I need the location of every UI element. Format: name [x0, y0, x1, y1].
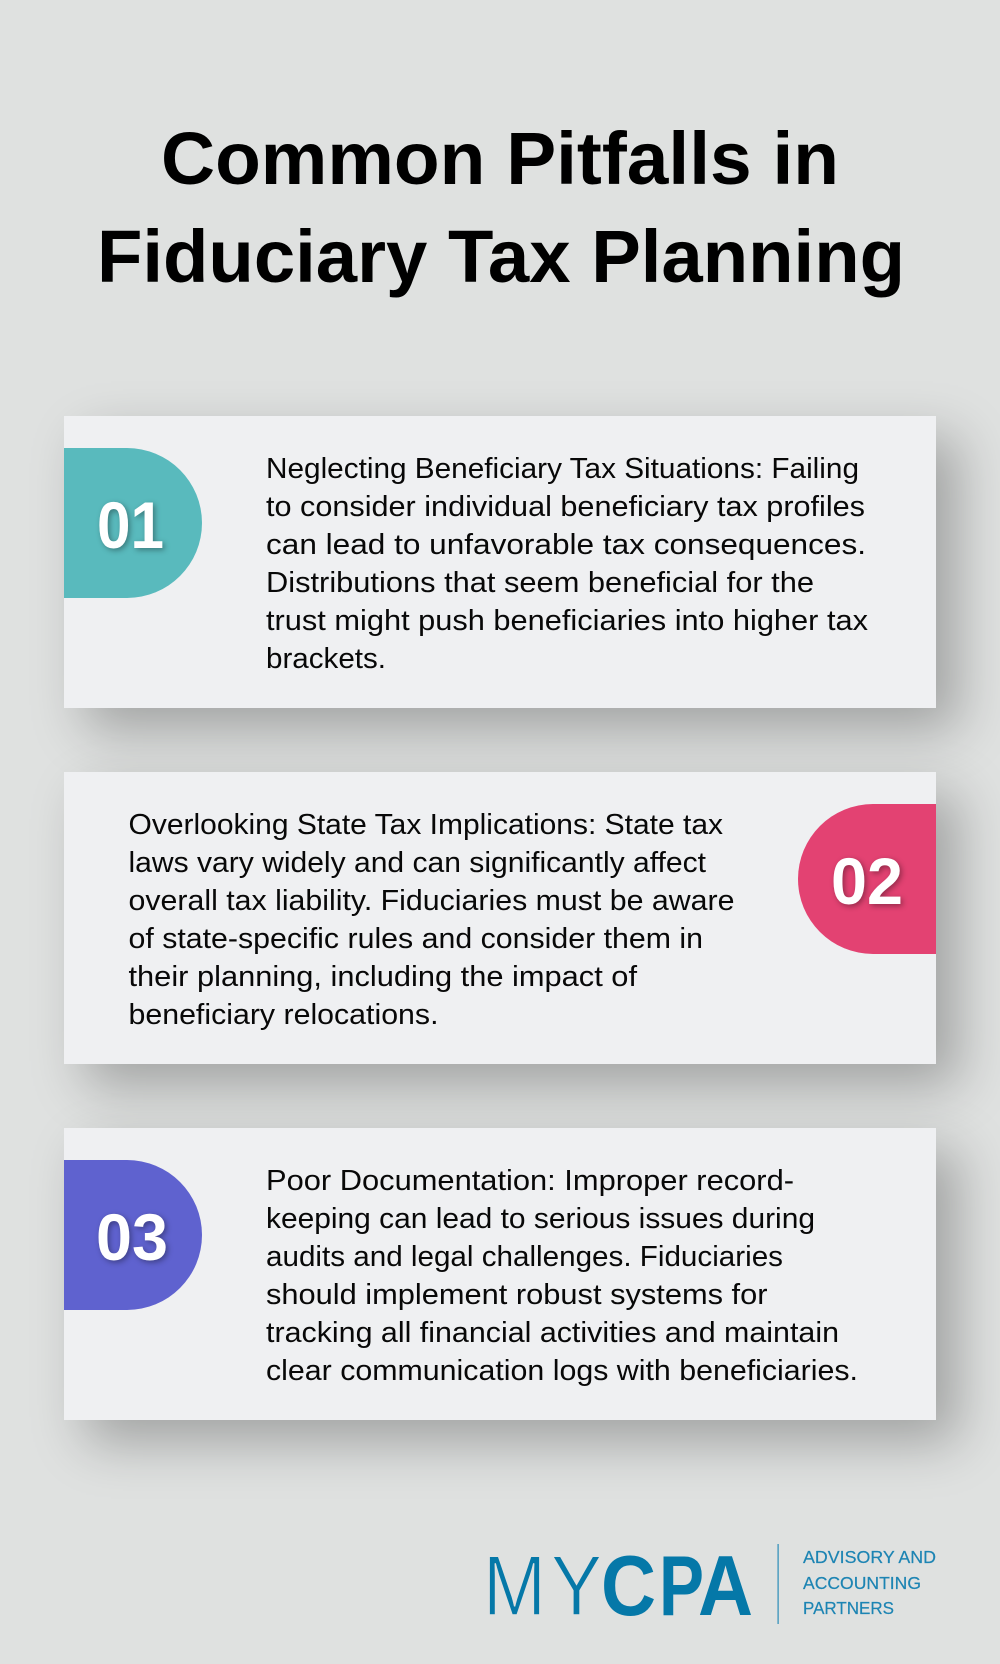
text: state tax implications: 02: [831, 844, 903, 918]
text: beneficiary tax situations: Distributions that seem beneficial for the: [266, 567, 814, 599]
text: state tax implications: overall tax liability. Fiduciaries must be aware: [128, 885, 734, 917]
text: state tax implications: beneficiary relocations.: [128, 999, 438, 1031]
badge: 01: [64, 448, 202, 598]
text: state tax implications: Overlooking State Tax Implications: State tax: [128, 809, 723, 841]
text: poor documentation: clear communication logs with beneficiaries.: [266, 1355, 858, 1387]
text: beneficiary tax situations: trust might push beneficiaries into higher tax: [266, 605, 868, 637]
text: state tax implications: laws vary widely and can significantly affect: [128, 847, 706, 879]
panel: pitfall 02: [64, 772, 936, 1064]
logo: MYCPA advisory and accounting partners: ADVISORY AND: [803, 1547, 936, 1567]
title: [97, 117, 905, 298]
text: state tax implications: [128, 809, 906, 1031]
text: poor documentation: should implement robust systems for: [266, 1279, 768, 1311]
title: Fiduciary Tax Planning: [97, 215, 905, 298]
text: poor documentation: 03: [96, 1200, 168, 1274]
text: beneficiary tax situations: [97, 453, 868, 675]
text: poor documentation: [96, 1165, 858, 1387]
text: beneficiary tax situations: brackets.: [266, 643, 386, 675]
text: beneficiary tax situations: Neglecting Beneficiary Tax Situations: Failing: [266, 453, 859, 485]
text: beneficiary tax situations: to consider individual beneficiary tax profiles: [266, 491, 865, 523]
text: poor documentation: keeping can lead to serious issues during: [266, 1203, 815, 1235]
logo: MYCPA advisory and accounting partners: Y: [551, 1539, 602, 1634]
title: Common Pitfalls in: [161, 117, 839, 200]
logo: MYCPA advisory and accounting partners: [483, 1539, 936, 1634]
logo: MYCPA advisory and accounting partners: P: [659, 1539, 704, 1634]
badge: 03: [64, 1160, 202, 1310]
text: poor documentation: audits and legal challenges. Fiduciaries: [266, 1241, 783, 1273]
text: state tax implications: of state-specific rules and consider them in: [128, 923, 703, 955]
logo: MYCPA advisory and accounting partners: ACCOUNTING: [803, 1573, 921, 1593]
text: beneficiary tax situations: 01: [97, 488, 164, 562]
logo: MYCPA advisory and accounting partners: C: [601, 1539, 656, 1634]
text: beneficiary tax situations: can lead to unfavorable tax consequences.: [266, 529, 866, 561]
badge: 02: [798, 804, 936, 954]
logo: MYCPA advisory and accounting partners: A: [698, 1539, 753, 1634]
panel: pitfall 03: [64, 1128, 936, 1420]
logo: MYCPA advisory and accounting partners: M: [483, 1539, 546, 1634]
logo: MYCPA advisory and accounting partners: PARTNERS: [803, 1598, 894, 1618]
text: poor documentation: tracking all financial activities and maintain: [266, 1317, 839, 1349]
text: state tax implications: their planning, including the impact of: [128, 961, 637, 993]
text: poor documentation: Poor Documentation: Improper record-: [266, 1165, 794, 1197]
panel: pitfall 01: [64, 416, 936, 708]
